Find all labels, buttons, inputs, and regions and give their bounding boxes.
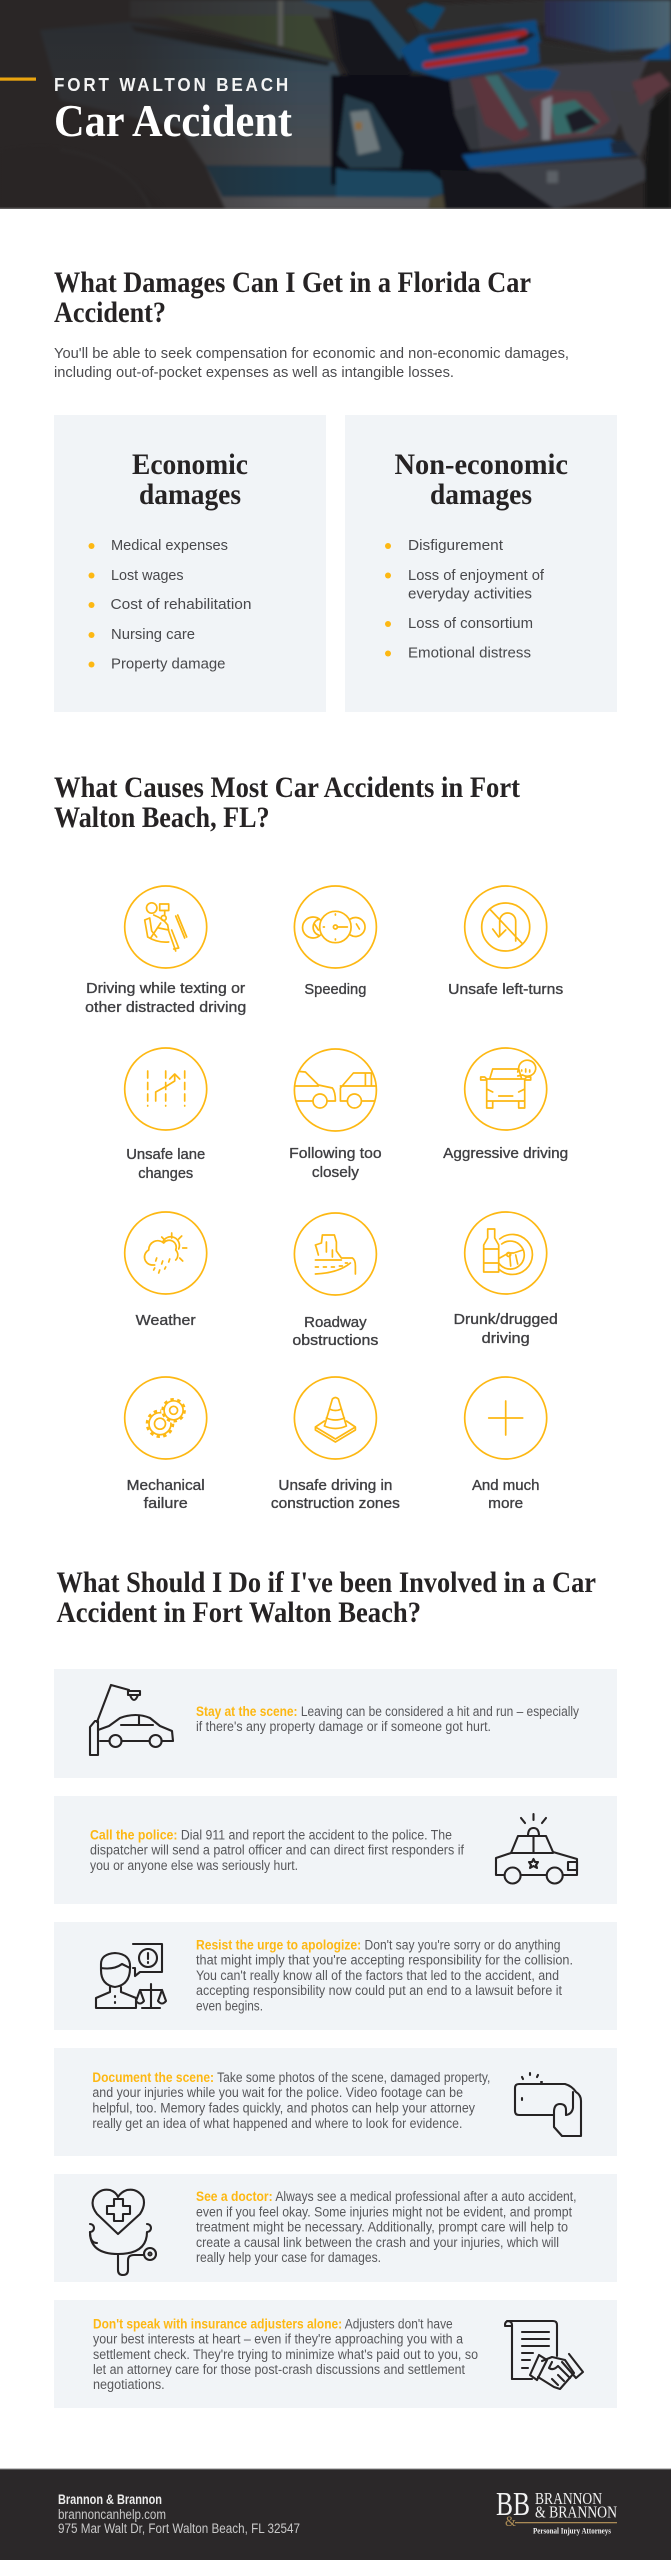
- list: economic items: [88, 537, 252, 673]
- text: negotiations.: [93, 2377, 165, 2392]
- label: closely: [312, 1164, 359, 1181]
- label: Driving while texting or: [86, 980, 245, 997]
- label: [289, 1145, 382, 1181]
- panel title: economic: Economic: [132, 448, 248, 481]
- list: non-economic items: Loss of enjoyment of: [408, 567, 545, 584]
- text: if there's any property damage or if someone got hurt.: [196, 1719, 491, 1734]
- logo: Brannon & Brannon: &: [505, 2514, 516, 2530]
- text: create a causal link between the crash and your injuries, which will: [196, 2235, 559, 2250]
- label: obstructions: [292, 1332, 378, 1349]
- icon: traffic cone: [294, 1377, 376, 1459]
- text: dispatcher will send a patrol officer and can direct first responders if: [90, 1843, 464, 1858]
- heading: damages: [54, 266, 531, 329]
- text: [92, 2070, 490, 2131]
- icon: speedometer: [294, 886, 376, 968]
- contact details: [58, 2492, 300, 2536]
- icon: hand holding phone: [515, 2073, 581, 2136]
- card: stay at the scene: [54, 1669, 617, 1778]
- label: [472, 1477, 539, 1512]
- logo: Brannon & Brannon: Personal Injury Attorneys: [533, 2526, 612, 2536]
- cause: drunk or drugged driving: [454, 1212, 558, 1347]
- text: Don't speak with insurance adjusters alone: Adjusters don't have: [93, 2316, 453, 2331]
- text: You can't really know all of the factors that led to the accident, and: [196, 1968, 559, 1983]
- label: [127, 1477, 205, 1512]
- text: [196, 2189, 576, 2265]
- icon: stethoscope with heart: [90, 2190, 156, 2275]
- label: other distracted driving: [85, 999, 246, 1016]
- list: economic items: Medical expenses: [111, 537, 228, 554]
- text: [93, 2316, 478, 2392]
- label: Roadway: [304, 1314, 367, 1331]
- panel title: non-economic: damages: [430, 478, 532, 511]
- logo: Brannon & Brannon: BRANNON: [535, 2489, 602, 2508]
- contact details: 975 Mar Walt Dr, Fort Walton Beach, FL 32547: [58, 2521, 300, 2536]
- cause: unsafe driving in construction zones: [271, 1377, 400, 1512]
- label: Speeding: [304, 981, 366, 998]
- text: See a doctor: Always see a medical professional after a auto accident,: [196, 2189, 576, 2204]
- list: non-economic items: Loss of consortium: [408, 615, 533, 632]
- hero banner: [0, 0, 671, 209]
- list: non-economic items: everyday activities: [408, 586, 532, 602]
- text: Document the scene: Take some photos of the scene, damaged property,: [92, 2070, 490, 2085]
- heading: damages: What Damages Can I Get in a Florida Car: [54, 266, 531, 299]
- text: Resist the urge to apologize: Don't say you're sorry or do anything: [196, 1937, 560, 1952]
- section: causes: [54, 771, 568, 1512]
- text: [196, 1937, 573, 2014]
- icon: rockfall on curved road: [294, 1213, 376, 1295]
- cause: mechanical failure: [125, 1377, 207, 1512]
- intro text: including out-of-pocket expenses as well as intangible losses.: [54, 364, 454, 381]
- hero title: Car Accident: [54, 96, 292, 146]
- panel: economic damages: [54, 415, 326, 712]
- list: non-economic items: Emotional distress: [408, 645, 531, 662]
- heading: causes: [54, 771, 520, 834]
- icon: distracted driver: [125, 886, 207, 968]
- hero kicker: FORT WALTON BEACH: [54, 75, 291, 95]
- text: treatment might be necessary. Additionally, prompt care will help to: [196, 2220, 568, 2235]
- label: [292, 1314, 378, 1349]
- logo: Brannon & Brannon: [496, 2486, 617, 2536]
- cause: unsafe left turns: [448, 886, 563, 998]
- panel title: economic: [132, 448, 248, 511]
- text: [196, 1704, 579, 1734]
- text: helpful, too. Memory fades quickly, and photos can help your attorney: [92, 2100, 475, 2116]
- intro text: [54, 345, 569, 381]
- contact details: Brannon & Brannon: [58, 2492, 162, 2507]
- text: you or anyone else was seriously hurt.: [90, 1858, 298, 1873]
- cause: aggressive driving: [443, 1048, 568, 1162]
- panel: non-economic damages: [345, 415, 617, 712]
- label: failure: [144, 1495, 188, 1512]
- section: what to do: [54, 1566, 617, 2408]
- hero photo: crashed cars: [0, 0, 671, 209]
- icon: two cars nose to nose: [294, 1049, 376, 1131]
- label: [85, 980, 246, 1016]
- list: non-economic items: Disfigurement: [408, 537, 504, 554]
- text: settlement check. They're trying to minimize what's paid out to you, so: [93, 2347, 478, 2362]
- label: changes: [138, 1165, 193, 1182]
- cause: following too closely: [289, 1049, 382, 1181]
- cause: and much more: [465, 1377, 547, 1512]
- heading: what to do: [56, 1566, 596, 1629]
- label: Unsafe lane: [126, 1146, 205, 1163]
- text: really help your case for damages.: [196, 2250, 381, 2265]
- card: resist the urge to apologize: [54, 1922, 617, 2030]
- label: Drunk/drugged: [454, 1311, 558, 1328]
- label: more: [488, 1495, 523, 1512]
- text: and your injuries while you wait for the police. Video footage can be: [92, 2085, 463, 2100]
- heading: what to do: What Should I Do if I've been Involved in a Car: [56, 1566, 596, 1599]
- panel title: non-economic: Non-economic: [394, 448, 568, 481]
- card: call the police: [54, 1796, 617, 1904]
- icon: car with angry speech bubble: [465, 1048, 547, 1130]
- text: [90, 1827, 464, 1873]
- list: non-economic items: [385, 537, 545, 662]
- icon: lane change: [125, 1048, 207, 1130]
- label: Weather: [136, 1312, 196, 1329]
- heading: causes: Walton Beach, FL?: [54, 801, 270, 834]
- text: Stay at the scene: Leaving can be considered a hit and run – especially: [196, 1704, 579, 1719]
- intro text: You'll be able to seek compensation for economic and non-economic damages,: [54, 345, 569, 362]
- footer: [0, 2468, 671, 2560]
- text: even begins.: [196, 1998, 263, 2014]
- logo: Brannon & Brannon: BB: [496, 2486, 530, 2523]
- icon: contract and handshake: [505, 2321, 583, 2389]
- cause: speeding: [294, 886, 376, 998]
- panel title: non-economic: [394, 448, 568, 511]
- text: even if you feel okay. Some injuries might not be evident, and prompt: [196, 2204, 572, 2220]
- text: that might imply that you're accepting responsibility for the collision.: [196, 1952, 573, 1968]
- card: see a doctor: [54, 2174, 617, 2282]
- label: Following too: [289, 1145, 382, 1162]
- logo: Brannon & Brannon: & BRANNON: [535, 2502, 617, 2522]
- text: accepting responsibility now could put an end to a lawsuit before it: [196, 1983, 562, 1998]
- cause: roadway obstructions: [292, 1213, 378, 1349]
- text: really get an idea of what happened and where to look for evidence.: [92, 2116, 462, 2131]
- hero accent bar: [0, 78, 36, 81]
- label: And much: [472, 1477, 539, 1494]
- label: [271, 1477, 400, 1512]
- icon: plus: [465, 1377, 547, 1459]
- cause: unsafe lane changes: [125, 1048, 207, 1182]
- panel title: economic: damages: [139, 478, 241, 511]
- icon: rain cloud and sun: [125, 1212, 207, 1294]
- card: insurance adjusters: [54, 2300, 617, 2408]
- list: economic items: Nursing care: [111, 626, 195, 643]
- text: let an attorney care for those post-crash discussions and settlement: [93, 2362, 465, 2377]
- icon: car hit street pole: [90, 1685, 173, 1755]
- icon: person, warning bubble and scales: [96, 1944, 166, 2008]
- icon: bottle and steering wheel: [465, 1212, 547, 1294]
- label: Unsafe driving in: [278, 1477, 392, 1494]
- label: [454, 1311, 558, 1347]
- label: Mechanical: [127, 1477, 205, 1494]
- heading: what to do: Accident in Fort Walton Beach?: [56, 1596, 421, 1629]
- contact details: brannoncanhelp.com: [58, 2507, 166, 2522]
- label: construction zones: [271, 1495, 400, 1512]
- heading: causes: What Causes Most Car Accidents in Fort: [54, 771, 520, 804]
- label: Aggressive driving: [443, 1145, 568, 1162]
- icon: no u-turn: [465, 886, 547, 968]
- text: Call the police: Dial 911 and report the accident to the police. The: [90, 1827, 452, 1842]
- card: document the scene: [54, 2048, 617, 2156]
- list: economic items: Property damage: [111, 656, 226, 673]
- icon: police car: [496, 1814, 577, 1884]
- list: economic items: Cost of rehabilitation: [110, 596, 252, 613]
- cause: distracted driving: [85, 886, 246, 1016]
- label: driving: [482, 1330, 530, 1347]
- heading: damages: Accident?: [54, 296, 166, 329]
- section: damages: [54, 266, 617, 712]
- text: your best interests at heart – even if they're approaching you with a: [93, 2332, 463, 2347]
- list: economic items: Lost wages: [111, 567, 184, 584]
- label: [126, 1146, 205, 1182]
- label: Unsafe left-turns: [448, 981, 563, 998]
- icon: gears: [125, 1377, 207, 1459]
- cause: weather: [125, 1212, 207, 1329]
